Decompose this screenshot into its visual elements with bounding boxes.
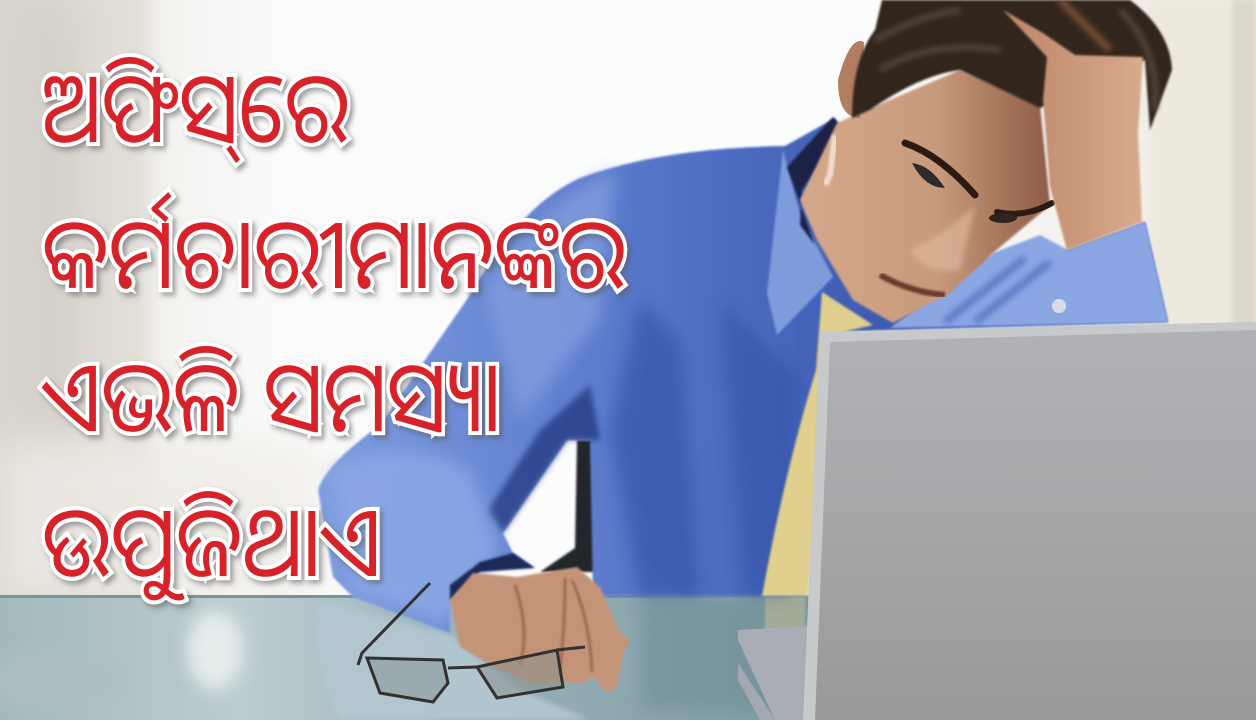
ear <box>838 41 864 118</box>
dark inner collar <box>787 117 845 245</box>
underarm shadow <box>488 385 600 533</box>
shoulder beneath the head <box>890 222 1168 328</box>
hand on head <box>1003 10 1143 250</box>
laptop <box>738 322 1256 720</box>
collar <box>767 150 833 335</box>
face <box>800 70 1052 323</box>
glass table <box>0 595 810 720</box>
title line 3: ଏଭଳି ସମସ୍ୟା <box>41 341 501 452</box>
shirt body <box>318 118 1168 633</box>
tie <box>762 292 873 596</box>
chest folds <box>610 300 700 596</box>
title line 1: ଅଫିସ୍‌ରେ <box>42 52 349 163</box>
sleeve highlight <box>330 452 500 625</box>
glasses <box>358 583 585 702</box>
hair <box>852 0 1172 130</box>
title line 2: କର୍ମଚାରୀମାନଙ୍କର <box>42 191 625 309</box>
hand on table <box>450 567 630 693</box>
title line 4: ଉପୁଜିଥାଏ <box>42 486 381 601</box>
cuff dark on sleeve at wrist <box>450 553 535 600</box>
chair back <box>540 440 599 572</box>
